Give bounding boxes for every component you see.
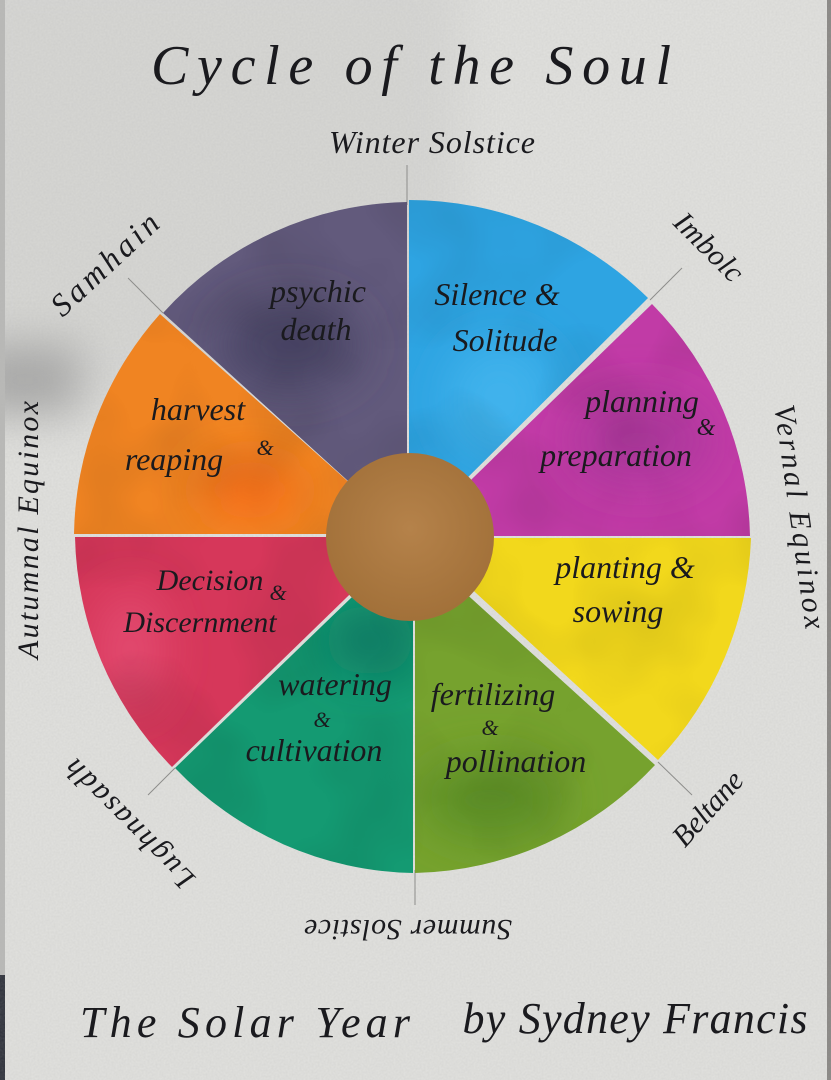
wash mottling — [70, 195, 760, 880]
wedge text: planning and preparation: planning — [583, 383, 699, 419]
wedge: watering and cultivation — [175, 597, 413, 873]
wedge text: decision and discernment: & — [269, 580, 287, 605]
wedge text: planting and sowing — [553, 549, 695, 629]
wedge text: decision and discernment: Discernment — [122, 606, 277, 639]
wedge text: planning and preparation: preparation — [538, 437, 692, 473]
wedge text: fertilizing and pollination — [431, 676, 586, 779]
label: summer solstice: Summer Solstice — [304, 913, 512, 946]
wedge text: fertilizing and pollination: fertilizing — [431, 676, 555, 712]
wedge text: watering and cultivation — [246, 666, 392, 768]
label: autumnal equinox: Autumnal Equinox — [12, 400, 45, 661]
wedge: harvest and reaping — [74, 314, 348, 534]
wedge text: psychic death — [268, 273, 366, 347]
wedge text: psychic death: death — [280, 311, 352, 347]
label: winter solstice: Winter Solstice — [329, 124, 535, 160]
label: lughnasadh: Lughnasadh — [58, 752, 202, 896]
wedge text: planning and preparation: & — [697, 415, 716, 441]
label: imbolc: Imbolc — [666, 205, 750, 289]
wedge: planting and sowing — [440, 538, 751, 760]
spoke lines — [128, 165, 692, 905]
wedge text: decision and discernment — [122, 564, 287, 639]
label: samhain: Samhain — [43, 205, 166, 323]
wedge text: silence and solitude: Silence & — [434, 276, 560, 312]
footer: the solar year: The Solar Year — [80, 998, 411, 1047]
wedge: silence and solitude — [409, 200, 648, 477]
colour wheel — [70, 190, 760, 880]
wedge text: psychic death: psychic — [268, 273, 366, 309]
wedge text: decision and discernment: Decision — [156, 564, 263, 597]
wedge text: harvest and reaping: reaping — [125, 441, 223, 477]
label: vernal equinox: Vernal Equinox — [767, 402, 831, 632]
wedge text: harvest and reaping: & — [256, 435, 274, 460]
label: beltane: Beltane — [666, 764, 750, 853]
wedge text: harvest and reaping: harvest — [151, 391, 246, 427]
wedge: planning and preparation — [471, 304, 750, 536]
title: Cycle of the Soul — [151, 35, 671, 97]
wedge text: harvest and reaping — [125, 391, 274, 477]
wedge: psychic death — [163, 202, 407, 481]
wedge text: fertilizing and pollination: & — [481, 715, 499, 740]
wedge text: planting and sowing: sowing — [573, 593, 663, 629]
wedge: fertilizing and pollination — [415, 596, 655, 873]
wedge text: watering and cultivation: & — [313, 707, 331, 732]
wedge text: planning and preparation — [538, 383, 716, 473]
wedge text: watering and cultivation: watering — [278, 666, 392, 702]
wedge text: fertilizing and pollination: pollination — [444, 743, 586, 779]
footer: by sydney francis: by Sydney Francis — [462, 994, 808, 1043]
centre gold circle — [326, 453, 494, 621]
wedge text: watering and cultivation: cultivation — [246, 732, 382, 768]
wedge text: silence and solitude — [434, 276, 560, 358]
wedge text: silence and solitude: Solitude — [453, 322, 557, 358]
wedge text: planting and sowing: planting & — [553, 549, 695, 585]
wedge: decision and discernment — [75, 537, 350, 767]
